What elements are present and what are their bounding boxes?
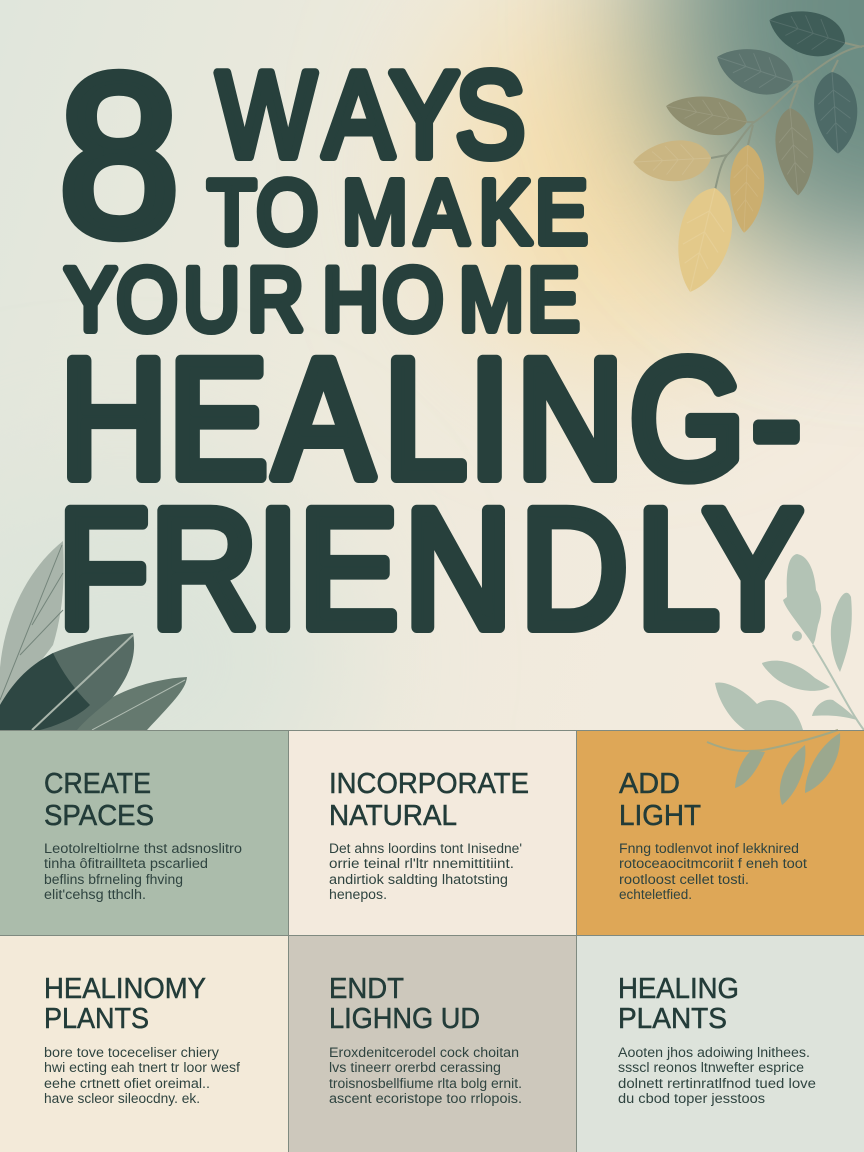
panel: incorporate natural: andirtiok saldting lhatotsting bbox=[329, 872, 508, 887]
title line: FRIENDLY: FRIENDLY bbox=[58, 474, 802, 663]
leaf: light grey bbox=[0, 541, 64, 705]
panel: healing plants bbox=[576, 935, 864, 1152]
numeral 8: 8 bbox=[59, 29, 179, 283]
panel: add light: rootloost cellet tosti. bbox=[619, 872, 749, 887]
title line: WAYS: WAYS bbox=[217, 47, 525, 183]
icon: large leaves bottom left bbox=[0, 541, 187, 730]
panel: incorporate natural: orrie teinal rl'ltr nnemittitiint. bbox=[329, 856, 514, 871]
leaf: mid grey bbox=[77, 677, 187, 730]
leaf: dark grey bbox=[0, 633, 134, 730]
panel: healinomy plants: HEALINOMY bbox=[44, 973, 206, 1005]
panel: healing plants: du cbod toper jesstoos bbox=[618, 1091, 765, 1106]
panel: add light: LIGHT bbox=[619, 800, 701, 832]
title line: YOUR HOME: YOUR HOME bbox=[65, 249, 580, 349]
panel: healinomy plants: hwi ecting eah tnert tr loor wesf bbox=[44, 1060, 240, 1075]
panel: healinomy plants bbox=[0, 935, 288, 1152]
panel: incorporate natural: henepos. bbox=[329, 887, 387, 902]
panel: add light: ADD bbox=[619, 768, 680, 800]
panel: endt lighng ud bbox=[288, 935, 576, 1152]
panel: endt lighng ud: ascent ecoristope too rrlopois. bbox=[329, 1091, 522, 1106]
panel: healinomy plants: PLANTS bbox=[44, 1003, 149, 1035]
panel: healing plants: HEALING bbox=[618, 973, 739, 1005]
title line: HEALING-: HEALING- bbox=[60, 324, 801, 513]
panel: healinomy plants: have scleor sileocdny. ek. bbox=[44, 1091, 200, 1106]
panel: endt lighng ud: troisnosbellfiume rlta bolg ernit. bbox=[329, 1076, 522, 1091]
panel: endt lighng ud: Eroxdenitcerodel cock choitan bbox=[329, 1045, 519, 1060]
icon: sage leaf sprig bottom right bbox=[715, 554, 864, 730]
panel: create spaces: tinha ôfitraillteta pscarlied bbox=[44, 856, 208, 871]
panel: create spaces: beflins bfrneling fhving bbox=[44, 872, 183, 887]
panel: healing plants: PLANTS bbox=[618, 1003, 727, 1035]
icon: leaf sprig on orange panel bbox=[707, 730, 840, 805]
panel: healing plants: ssscl reonos ltnwefter esprice bbox=[618, 1060, 804, 1075]
panel: healing plants: dolnett rertinratlfnod tued love bbox=[618, 1076, 816, 1091]
panel: incorporate natural: INCORPORATE bbox=[329, 768, 529, 800]
panel: healing plants: Aooten jhos adoiwing lnithees. bbox=[618, 1045, 810, 1060]
panel: add light: echteletfied. bbox=[619, 887, 692, 902]
icon: leaf branch top right bbox=[632, 1, 864, 298]
panel: incorporate natural: Det ahns loordins tont Inisedne' bbox=[329, 841, 522, 856]
title bbox=[58, 29, 802, 663]
panel: create spaces: elit'cehsg tthclh. bbox=[44, 887, 146, 902]
title line: TO MAKE: TO MAKE bbox=[208, 161, 588, 262]
panel: incorporate natural: NATURAL bbox=[329, 800, 457, 832]
panel: create spaces: SPACES bbox=[44, 800, 154, 832]
panel: endt lighng ud: LIGHNG UD bbox=[329, 1003, 480, 1035]
panel: healinomy plants: bore tove toceceliser chiery bbox=[44, 1045, 219, 1060]
panel: create spaces: CREATE bbox=[44, 768, 151, 800]
panel: add light: Fnng todlenvot inof lekknired bbox=[619, 841, 799, 856]
panel: incorporate natural bbox=[288, 730, 576, 935]
panel: endt lighng ud: ENDT bbox=[329, 973, 404, 1005]
panel: endt lighng ud: lvs tineerr orerbd cerassing bbox=[329, 1060, 501, 1075]
panel: add light bbox=[576, 730, 864, 935]
panel: create spaces bbox=[0, 730, 288, 935]
panel: create spaces: Leotolreltiolrne thst adsnoslitro bbox=[44, 841, 242, 856]
background gradient bbox=[0, 0, 864, 730]
panel: healinomy plants: eehe crtnett ofiet oreimal.. bbox=[44, 1076, 210, 1091]
panel: add light: rotoceaocitmcoriit f eneh toot bbox=[619, 856, 807, 871]
